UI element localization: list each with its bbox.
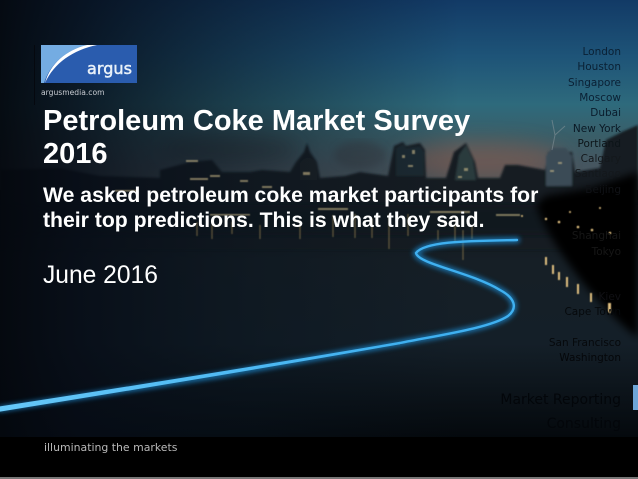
office list: San Francisco <box>549 337 621 349</box>
dark right river bank <box>536 172 638 338</box>
tagline: illuminating the markets <box>44 441 177 454</box>
blue tab <box>633 385 638 410</box>
logo: argus: argus <box>87 59 132 78</box>
office list: Cape Town <box>564 306 621 318</box>
dusk glow on horizon <box>400 142 564 178</box>
office list: Calgary <box>581 153 621 165</box>
date: June 2016 <box>43 262 158 289</box>
glowing blue river line <box>0 240 517 412</box>
smoke and haze <box>160 136 300 164</box>
title <box>43 105 470 170</box>
office list: Tokyo <box>592 246 621 258</box>
water reflections <box>197 214 472 260</box>
subtitle <box>43 184 538 232</box>
service: consulting: Consulting <box>547 416 621 432</box>
title: Petroleum Coke Market Survey <box>43 105 470 137</box>
office list: Kiev <box>599 291 621 303</box>
office list: Moscow <box>579 92 621 104</box>
city lights <box>115 150 562 216</box>
subtitle: their top predictions. This is what they said. <box>43 209 484 232</box>
office list: Houston <box>577 61 621 73</box>
service: market reporting: Market Reporting <box>500 392 621 408</box>
title: 2016 <box>43 138 108 170</box>
office list: New York <box>573 123 621 135</box>
logo: argus <box>41 45 137 83</box>
office list: Washington <box>559 352 621 364</box>
office list: Beijing <box>585 184 621 196</box>
subtitle: We asked petroleum coke market participants for <box>43 184 538 207</box>
skyline silhouette <box>0 125 638 250</box>
office list <box>549 46 621 364</box>
black footer band <box>0 437 638 477</box>
crane <box>552 120 565 150</box>
website url: argusmedia.com <box>41 88 105 97</box>
office list: Santiago <box>575 168 621 180</box>
office list: Portland <box>578 138 621 150</box>
office list: Dubai <box>590 107 621 119</box>
office list: Singapore <box>568 77 621 89</box>
vertical rule beside logo <box>34 45 35 105</box>
office list: London <box>582 46 621 58</box>
office list: Shanghai <box>572 230 621 242</box>
